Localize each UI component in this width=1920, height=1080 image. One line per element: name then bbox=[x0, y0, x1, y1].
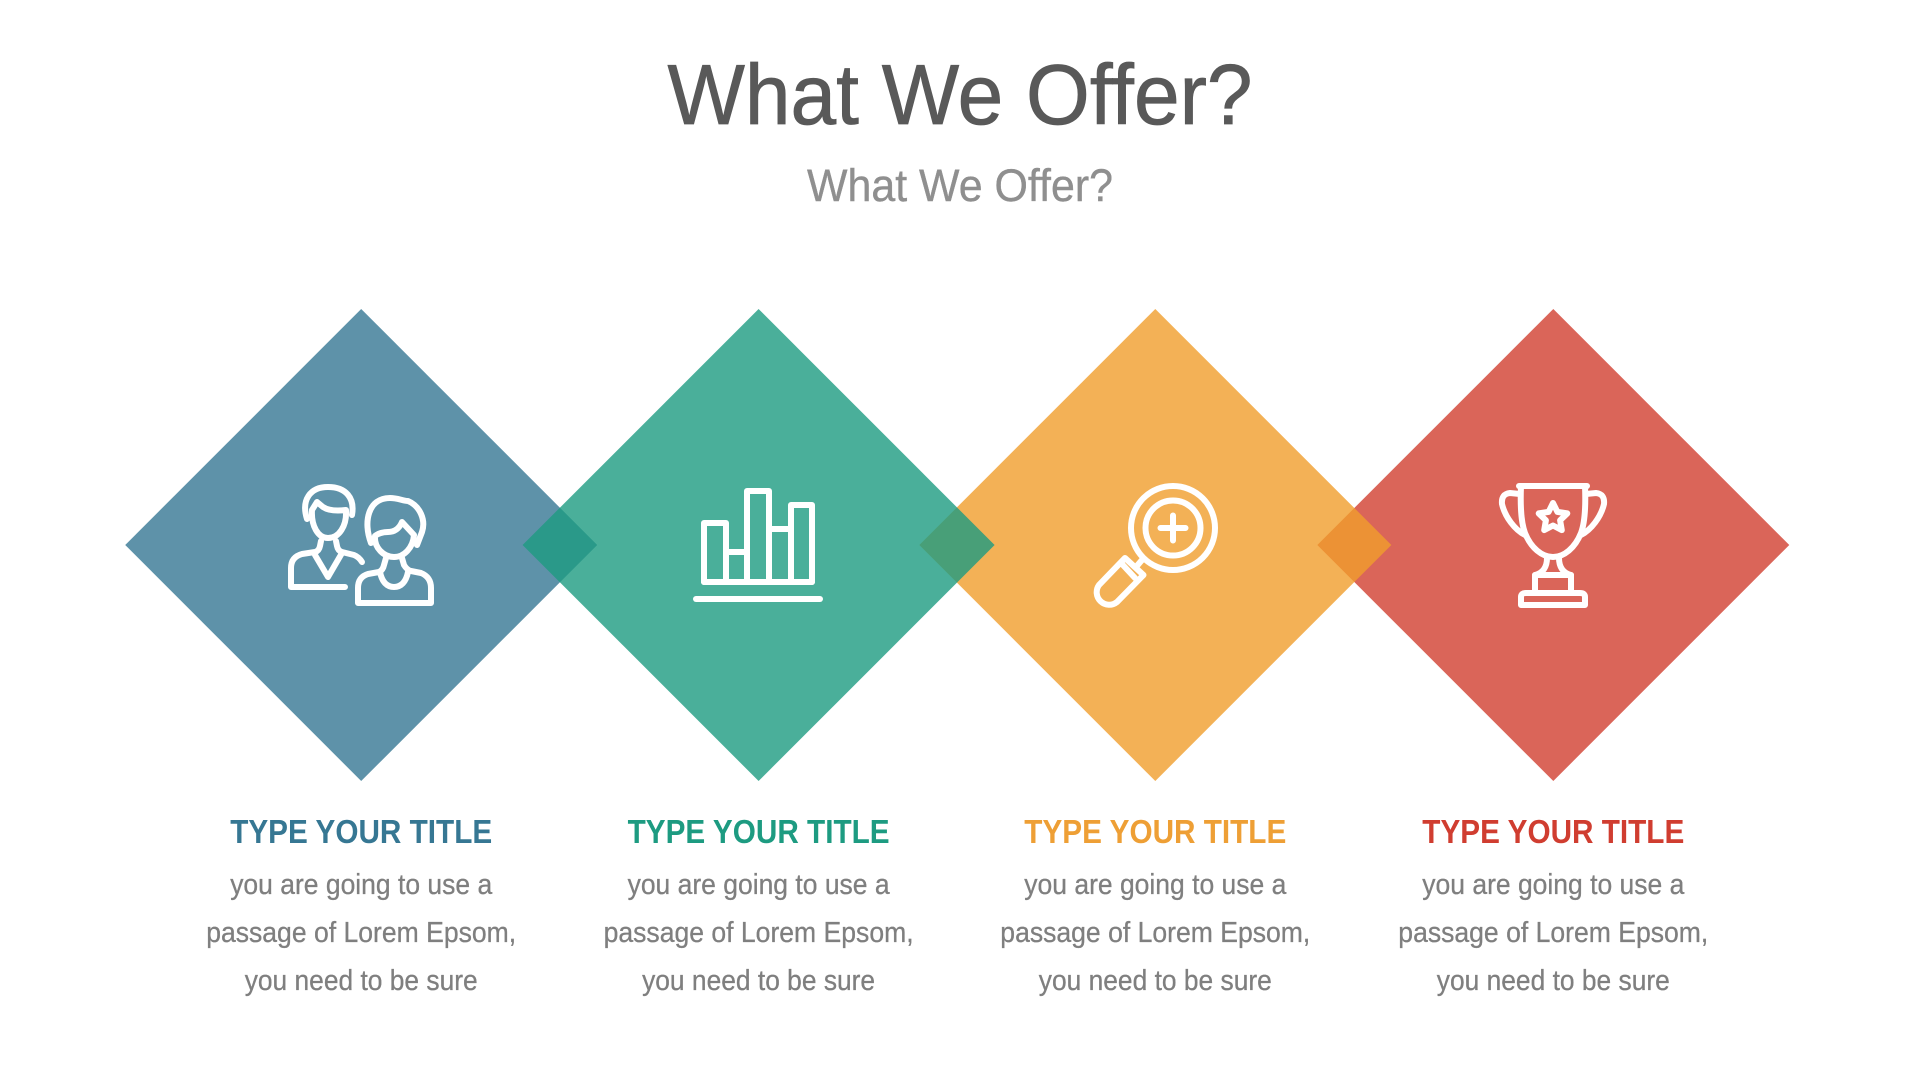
body: red column: you are going to use a bbox=[1422, 869, 1685, 901]
heading: green column: TYPE YOUR TITLE bbox=[628, 813, 890, 850]
heading: red column: TYPE YOUR TITLE bbox=[1422, 813, 1684, 850]
body: orange column: passage of Lorem Epsom, bbox=[1000, 917, 1310, 949]
body: orange column: you are going to use a bbox=[1024, 869, 1287, 901]
text block: green column bbox=[604, 813, 914, 997]
body: green column: passage of Lorem Epsom, bbox=[604, 917, 914, 949]
body: red column: passage of Lorem Epsom, bbox=[1398, 917, 1708, 949]
body: blue column: you need to be sure bbox=[245, 965, 478, 997]
body: green column: you need to be sure bbox=[642, 965, 875, 997]
text block: red column bbox=[1398, 813, 1708, 997]
diamond: orange bbox=[919, 309, 1391, 781]
icon: trophy bbox=[1502, 486, 1604, 605]
diamond: blue bbox=[125, 309, 597, 781]
body: orange column: you need to be sure bbox=[1039, 965, 1272, 997]
icon: bar chart bbox=[696, 491, 820, 599]
heading: blue column: TYPE YOUR TITLE bbox=[230, 813, 492, 850]
text block: orange column bbox=[1000, 813, 1310, 997]
diamond: green bbox=[523, 309, 995, 781]
text block: blue column bbox=[206, 813, 516, 997]
body: green column bbox=[604, 869, 914, 997]
body: blue column: you are going to use a bbox=[230, 869, 493, 901]
body: red column bbox=[1398, 869, 1708, 997]
heading: orange column: TYPE YOUR TITLE bbox=[1024, 813, 1286, 850]
body: red column: you need to be sure bbox=[1437, 965, 1670, 997]
icon: magnifying glass bbox=[1097, 486, 1215, 605]
body: orange column bbox=[1000, 869, 1310, 997]
body: blue column bbox=[206, 869, 516, 997]
body: blue column: passage of Lorem Epsom, bbox=[206, 917, 516, 949]
title: What We Offer? bbox=[668, 48, 1252, 143]
icon: two people bbox=[291, 487, 431, 603]
body: green column: you are going to use a bbox=[628, 869, 890, 901]
subtitle: What We Offer? bbox=[807, 160, 1113, 211]
diamond: red bbox=[1317, 309, 1789, 781]
